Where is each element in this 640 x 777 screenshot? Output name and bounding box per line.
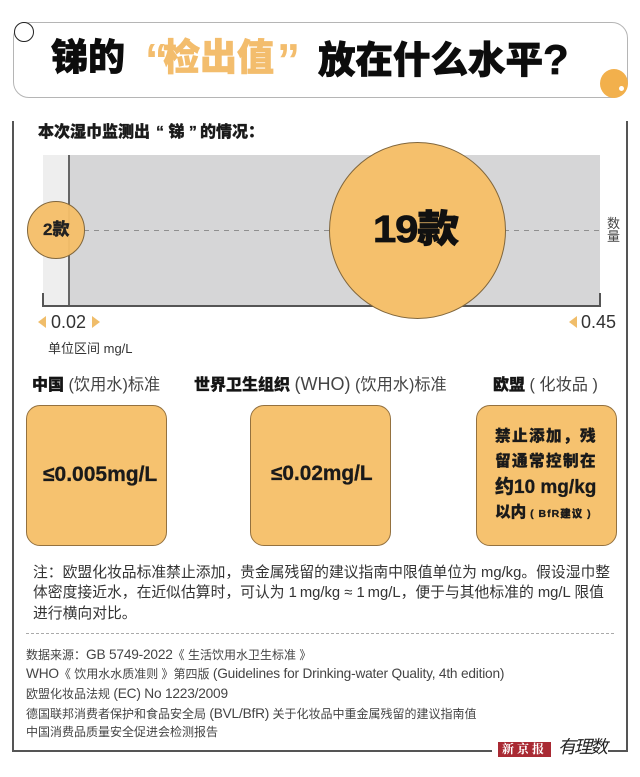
card text [495, 427, 597, 521]
note line 3: 进行横向对比。 [33, 606, 137, 622]
opening quote: “ [145, 34, 168, 86]
line 4: 以内 ( BfR建议 ) [495, 504, 592, 521]
source 5: 中国消费品质量安全促进会检测报告 [26, 725, 218, 739]
brand script: 有理数 [558, 737, 606, 757]
source 4: 德国联邦消费者保护和食品安全局 (BVL/BfR) 关于化妆品中重金属残留的建议指南值 [26, 706, 476, 721]
label 19 products: 19款 [373, 209, 458, 251]
line 2: 留通常控制在 [495, 453, 597, 470]
0.02 divider line [68, 155, 70, 306]
outer frame [12, 121, 628, 752]
highlighted word: 检出值 [163, 37, 274, 78]
left axis tick [42, 293, 44, 306]
value: 0.02 [51, 312, 86, 332]
label 2 products: 2款 [43, 220, 69, 239]
y axis label: 数量 [607, 216, 620, 244]
heading part 1: 本次湿巾监测出 [38, 124, 150, 141]
small highlight on orange dot [619, 86, 624, 91]
value: 0.45 [581, 312, 616, 332]
decorative ring top left [14, 22, 34, 42]
source 2: WHO《 饮用水水质准则 》第四版 (Guidelines for Drinking-water Quality, 4th edition) [26, 666, 504, 681]
bubble: 19 products [329, 142, 506, 319]
newspaper badge: 新京报 [502, 742, 547, 756]
title text part 2: 放在什么水平? [318, 36, 569, 83]
note line 2: 体密度接近水，在近似估算时，可认为 1 mg/kg ≈ 1 mg/L，便于与其他标准的 mg/L 限值 [33, 585, 604, 601]
decorative orange dot bottom right [600, 69, 628, 98]
right arrow [92, 316, 100, 328]
card: EU limit [476, 405, 617, 546]
line 1: 禁止添加，残 [495, 428, 597, 445]
note line 1: 注：欧盟化妆品标准禁止添加，贵金属残留的建议指南中限值单位为 mg/kg。假设湿巾整 [33, 565, 610, 581]
data sources [26, 647, 504, 739]
axis label 0.45 with arrow [569, 312, 616, 332]
x axis [42, 305, 601, 306]
heading: WHO standard: 世界卫生组织 (WHO) (饮用水)标准 [194, 374, 447, 394]
bubble: 2 products [27, 201, 85, 259]
chart heading [38, 123, 264, 141]
banner outline [13, 22, 628, 98]
heading: EU standard: 欧盟 ( 化妆品 ) [493, 376, 598, 394]
source 3: 欧盟化妆品法规 (EC) No 1223/2009 [26, 686, 228, 701]
card: China limit [26, 405, 167, 546]
limit value: ≤0.02mg/L [271, 462, 373, 485]
light band below 0.02 [43, 155, 69, 306]
left arrow [569, 316, 577, 328]
dashed quantity line [84, 230, 600, 231]
right axis tick [599, 293, 600, 306]
logo [492, 735, 608, 765]
heading quoted term: “ 锑 ” [156, 124, 197, 141]
bubble chart [27, 142, 620, 319]
grey band 0.02 to 0.45 [69, 155, 600, 306]
axis label 0.02 with arrows [38, 312, 100, 332]
heading part 2: 的情况： [200, 124, 264, 141]
left arrow [38, 316, 46, 328]
closing quote: ” [277, 34, 300, 86]
unit label: 单位区间 mg/L [48, 341, 133, 356]
title text part 1: 锑的 [51, 37, 125, 78]
title banner [13, 22, 628, 98]
footnote [33, 564, 610, 622]
title highlighted term [145, 34, 300, 86]
card: WHO limit [250, 405, 391, 546]
source 1: 数据来源：GB 5749-2022《 生活饮用水卫生标准 》 [26, 647, 311, 662]
heading: China standard: 中国 (饮用水)标准 [32, 376, 160, 394]
limit value: ≤0.005mg/L [43, 463, 157, 486]
line 3: 约10 mg/kg [495, 477, 596, 498]
